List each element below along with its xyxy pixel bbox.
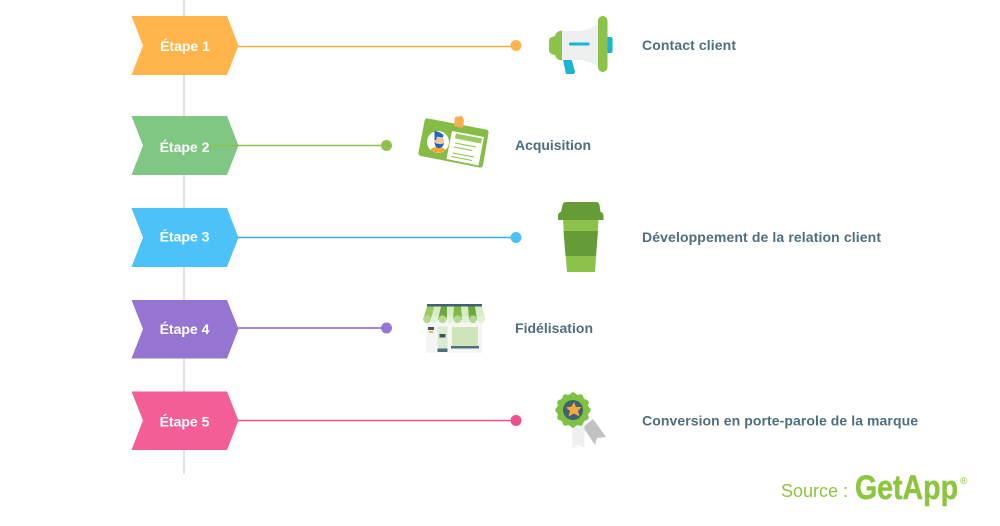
source credit: GetApp [855, 469, 958, 507]
chevron: étape 5: Étape 5 [160, 414, 210, 430]
step 5: conversion [132, 392, 918, 450]
icon: storefront [423, 304, 486, 353]
chevron: étape 3 [132, 208, 238, 267]
step 1: contact client [132, 16, 736, 75]
icon: megaphone [549, 16, 612, 74]
label: développement: Développement de la relation client [642, 229, 881, 245]
connector 5 [238, 415, 522, 426]
connector 2 [210, 140, 392, 151]
label: acquisition: Acquisition [515, 137, 591, 153]
label: conversion: Conversion en porte-parole de la marque [642, 412, 918, 428]
step 3: développement [132, 202, 881, 272]
source credit: ® [960, 476, 968, 487]
icon: coffee cup [558, 202, 604, 272]
chevron: étape 1: Étape 1 [160, 38, 210, 54]
chevron: étape 3: Étape 3 [160, 228, 210, 244]
step 4: fidélisation [132, 300, 593, 358]
source credit: Source : [781, 481, 848, 501]
chevron: étape 1 [132, 16, 238, 75]
chevron: étape 2 [132, 116, 238, 175]
label: contact client: Contact client [642, 37, 736, 53]
source credit [781, 469, 968, 507]
chevron: étape 4 [132, 300, 238, 358]
chevron: étape 5 [132, 392, 238, 450]
icon: award badge [555, 392, 606, 449]
chevron: étape 4: Étape 4 [160, 321, 210, 337]
chevron: étape 2: Étape 2 [160, 139, 210, 155]
icon: id card [418, 116, 489, 168]
label: fidélisation: Fidélisation [515, 320, 593, 336]
step 2: acquisition [132, 116, 591, 175]
connector 3 [238, 232, 522, 243]
connector 1 [238, 40, 522, 51]
connector 4 [238, 322, 392, 334]
